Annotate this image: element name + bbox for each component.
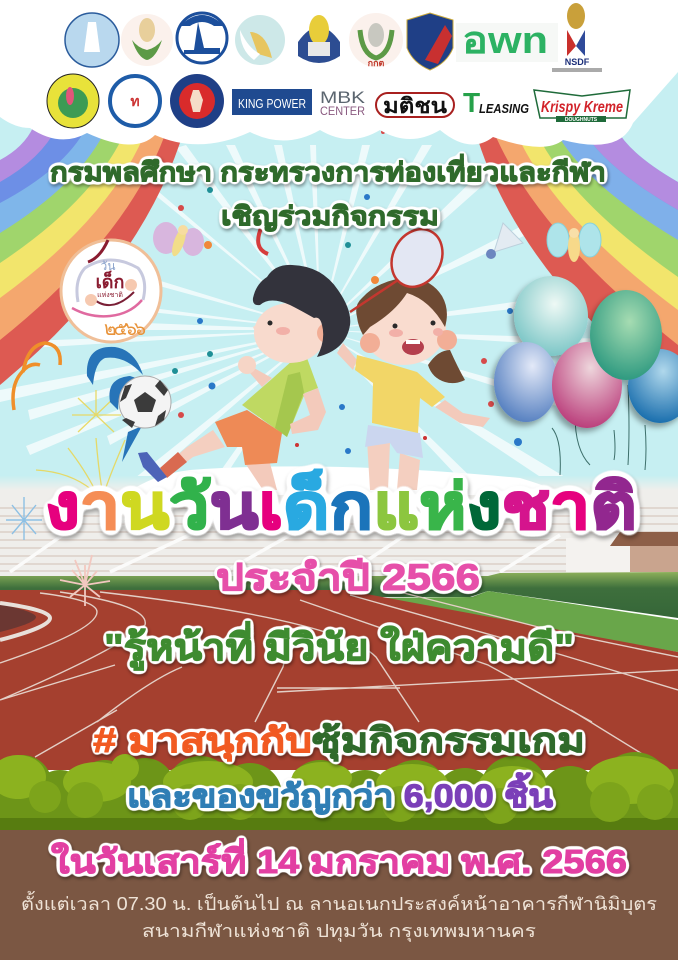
logo: Tourist Police shield (407, 13, 453, 70)
logo: Matichon (376, 93, 454, 118)
logo: Muaythai association (170, 74, 224, 128)
firework: stadium (60, 555, 110, 606)
logo: Krispy Kreme: DOUGHNUTS (565, 117, 598, 123)
logo: MBK Center: MBK (320, 88, 366, 107)
firework: blue (6, 497, 42, 540)
grass field (360, 591, 678, 652)
white cloud behind title (125, 466, 560, 495)
slogan: "รู้หน้าที่ มีวินัย ใฝ่ความดี" (104, 621, 574, 671)
balloon strings (552, 385, 646, 475)
icon: soccer ball (119, 376, 171, 428)
logo: sports association (110, 76, 160, 126)
confetti dots (80, 130, 522, 454)
illustration: boy (138, 265, 350, 490)
ribbon: red (258, 226, 268, 254)
logos row one (65, 3, 602, 72)
logo: Sports Authority of Thailand (298, 15, 340, 63)
badge: National Children's Day logo: เด็ก (96, 270, 124, 292)
logo: Department of Physical Education (121, 14, 173, 66)
time and venue line one: ตั้งแต่เวลา 07.30 น. เป็นต้นไป ณ ลานอเนกประสงค์หน้าอาคารกีฬานิมิบุตร (21, 891, 657, 915)
icon: shuttlecock (486, 223, 523, 259)
ribbon: blue (87, 347, 143, 462)
icon: butterfly left (153, 222, 204, 258)
logo: Krispy Kreme (534, 90, 630, 123)
ribbon: orange (13, 343, 60, 410)
hedge (0, 572, 678, 618)
logo: Pathum Wan district (47, 74, 99, 128)
icon: badminton racket (350, 220, 452, 312)
illustration: girl (337, 277, 490, 490)
balloons (494, 276, 678, 428)
background: sky (0, 0, 678, 490)
logo: MBK Center: CENTER (320, 104, 365, 118)
logo: own: อwn (462, 20, 548, 62)
logo: King Power (232, 89, 312, 115)
stadium stands (0, 476, 678, 576)
left rainbow curtain (0, 120, 187, 385)
prizes line: และของขวัญกว่า 6,000 ชิ้น (127, 772, 553, 815)
logo: T Leasing (463, 87, 529, 118)
logo: MBK Center (320, 88, 366, 118)
logo: elephant crest: กกต (368, 58, 385, 68)
logos row two (47, 74, 630, 128)
badge: National Children's Day logo: ๒๕๖๖ (104, 319, 146, 340)
subtitle: year: ประจำปี 2566 (216, 557, 480, 598)
logo: Krispy Kreme: Krispy Kreme (541, 99, 623, 116)
brown footer band (0, 830, 678, 960)
logo cloud banner (0, 0, 678, 147)
logo: elephant crest (349, 13, 403, 68)
logo: T Leasing: LEASING (479, 101, 529, 116)
logo: NSDF (552, 3, 602, 72)
badge: National Children's Day logo: แห่งชาติ (97, 291, 123, 299)
firework left (36, 390, 125, 490)
heading: organiser: กรมพลศึกษา กระทรวงการท่องเที่ยวและกีฬา (50, 153, 606, 187)
badge: National Children's Day logo (61, 240, 161, 342)
time and venue line two: สนามกีฬาแห่งชาติ ปทุมวัน กรุงเทพมหานคร (142, 921, 536, 942)
running track (0, 590, 678, 770)
date: ในวันเสาร์ที่ 14 มกราคม พ.ศ. 2566 (51, 838, 627, 880)
logo: sports association: ท (130, 93, 140, 109)
background: sun rays (0, 145, 640, 500)
right rainbow curtain (475, 120, 678, 400)
logo: Ministry of Tourism and Sports (65, 13, 119, 67)
logo: T Leasing: T (463, 87, 480, 118)
icon: butterfly right (547, 223, 601, 262)
badge: National Children's Day logo: วัน (101, 259, 115, 273)
activity line: # มาสนุกกับ ซุ้มกิจกรรมเกม (93, 722, 585, 762)
logo: Matichon: มติชน (383, 95, 448, 118)
logo: NSDF: NSDF (565, 57, 590, 67)
logo: Department of Tourism (235, 15, 285, 65)
bushes (0, 752, 678, 830)
logo: King Power: KING POWER (238, 96, 306, 111)
logo: Tourism Authority of Thailand (177, 13, 227, 63)
main title: งานวันเด็กแห่งชาติ (45, 469, 637, 542)
heading: invitation: เชิญร่วมกิจกรรม (221, 201, 439, 232)
